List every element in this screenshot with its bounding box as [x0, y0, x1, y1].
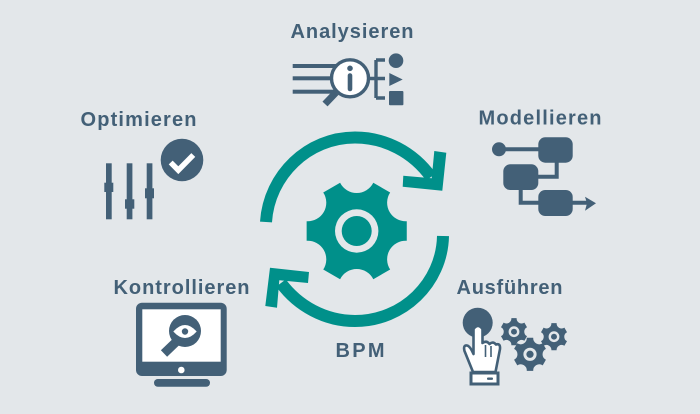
icon: central gear — [307, 183, 407, 279]
heading: Ausführen: Ausführen — [456, 277, 562, 299]
icon: hand — [464, 326, 500, 384]
heading: Modellieren: Modellieren — [478, 108, 602, 130]
icon: Modellieren — [492, 137, 596, 216]
heading: BPM: BPM — [336, 340, 384, 362]
icon: Analysieren — [293, 53, 403, 105]
heading: Kontrollieren: Kontrollieren — [114, 277, 250, 299]
heading: Analysieren: Analysieren — [290, 21, 414, 43]
icon: gear bottom — [514, 338, 546, 371]
icon: Optimieren check badge — [161, 139, 203, 181]
icon: Ausführen — [463, 308, 567, 384]
heading: Optimieren: Optimieren — [80, 109, 196, 131]
icon: magnifier with eye — [164, 315, 201, 354]
icon: Kontrollieren monitor — [136, 303, 227, 387]
icon: gear left — [501, 318, 527, 345]
central cycle with gear — [265, 138, 446, 321]
arrow: upper cycle arc — [266, 138, 446, 222]
icon: Optimieren sliders — [104, 163, 154, 219]
icon: pressed button — [463, 308, 493, 338]
icon: gear right — [541, 323, 567, 350]
arrow: lower cycle arc — [265, 236, 443, 321]
